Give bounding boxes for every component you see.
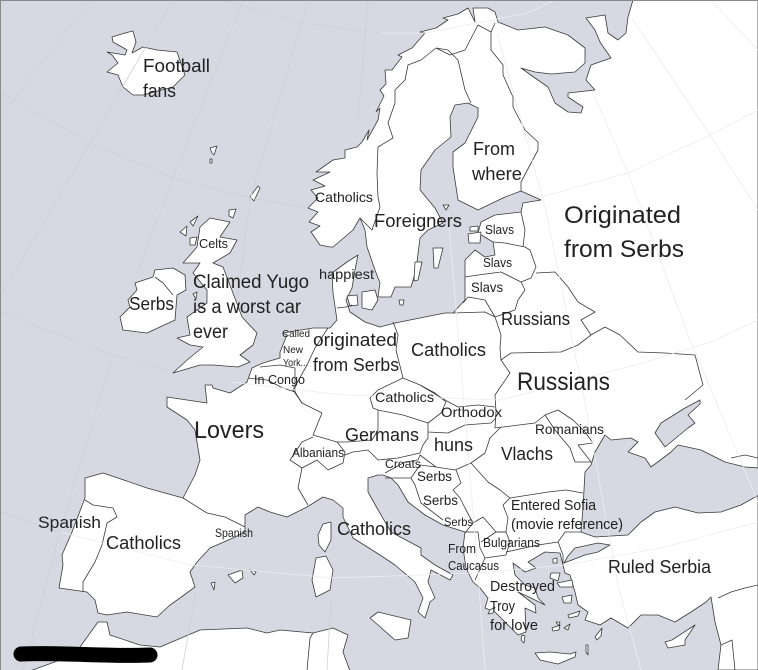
label: Ireland: Serbs (129, 294, 174, 314)
label: Greece line 1: Destroyed (490, 578, 555, 595)
label: Bulgaria line 1: Entered Sofia (511, 498, 597, 514)
label: Scotland: Celts (199, 236, 228, 251)
label: Lithuania: Slavs (471, 279, 503, 295)
label: Bosnia: Serbs (423, 492, 458, 508)
label: Denmark: happiest (319, 266, 374, 282)
island: Great Britain (173, 218, 257, 373)
label: Estonia: Slavs (485, 222, 514, 237)
label: Greece line 3: for love (490, 617, 538, 634)
label: Latvia: Slavs (483, 255, 512, 270)
label: Russia line 1: Originated (564, 202, 681, 229)
redaction bar (21, 654, 150, 655)
label: Iceland second line: fans (143, 81, 176, 101)
label: England line 3: ever (193, 322, 229, 343)
label: Turkey: Ruled Serbia (608, 557, 712, 577)
land: Africa (30, 622, 350, 670)
label: North Macedonia: Bulgarians (483, 535, 540, 550)
sea: Black Sea (581, 435, 758, 537)
label: Ukraine: Russians (517, 368, 610, 396)
label: Austria: Germans (345, 425, 419, 445)
label: Sweden: Foreigners (374, 211, 462, 231)
islands: Baltic and Danish straits (347, 205, 481, 310)
label: Bulgaria line 2: (movie reference) (511, 517, 623, 533)
islands: Aegean and Cyprus (488, 558, 695, 655)
islands: small north Atlantic and Mediterranean islands (180, 146, 576, 664)
label: Portugal: Spanish (38, 513, 101, 532)
label: Netherlands line 2: New (283, 345, 304, 356)
label: Germany line 1: originated (313, 330, 397, 350)
label: Iceland: Football (143, 56, 210, 76)
label: Belarus: Russians (501, 309, 570, 329)
label: Slovakia: Orthodox (441, 404, 502, 420)
label: Italy: Catholics (337, 519, 411, 539)
label: Finland line 2: where (471, 164, 522, 184)
label: Netherlands line 1: Called (282, 329, 310, 340)
sea: Marmara (564, 543, 610, 563)
label: Moldova: Romanians (535, 421, 604, 437)
label: Croatia: Serbs (417, 468, 452, 484)
label: Montenegro: Serbs (444, 515, 473, 529)
label: Czechia: Catholics (375, 389, 434, 405)
island: Iceland (107, 31, 185, 95)
label: Finland line 1: From (473, 139, 515, 159)
label: Slovenia: Croats (385, 457, 421, 471)
label: Romania: Vlachs (501, 444, 553, 464)
label: France: Lovers (194, 417, 264, 444)
label: Spain: Catholics (106, 533, 181, 553)
label: England line 2: is a worst car (193, 297, 302, 318)
label: Albania line 1: From (448, 542, 476, 556)
label: Russia line 2: from Serbs (564, 236, 684, 263)
label: Catalonia: Spanish (215, 526, 253, 540)
label: England line 1: Claimed Yugo (193, 272, 309, 293)
label: Norway: Catholics (315, 189, 373, 205)
label: Belgium: In Congo (254, 372, 305, 387)
label: Hungary: huns (434, 435, 473, 455)
island: Ireland (120, 268, 186, 333)
label: Poland: Catholics (411, 340, 486, 360)
sea: Azov (655, 400, 700, 447)
label: Germany line 2: from Serbs (313, 355, 399, 375)
label: Switzerland: Albanians (292, 446, 344, 460)
label: Netherlands line 3: York... (283, 358, 308, 369)
label: Greece line 2: Troy (490, 598, 515, 615)
label: Albania line 2: Caucasus (448, 559, 499, 573)
